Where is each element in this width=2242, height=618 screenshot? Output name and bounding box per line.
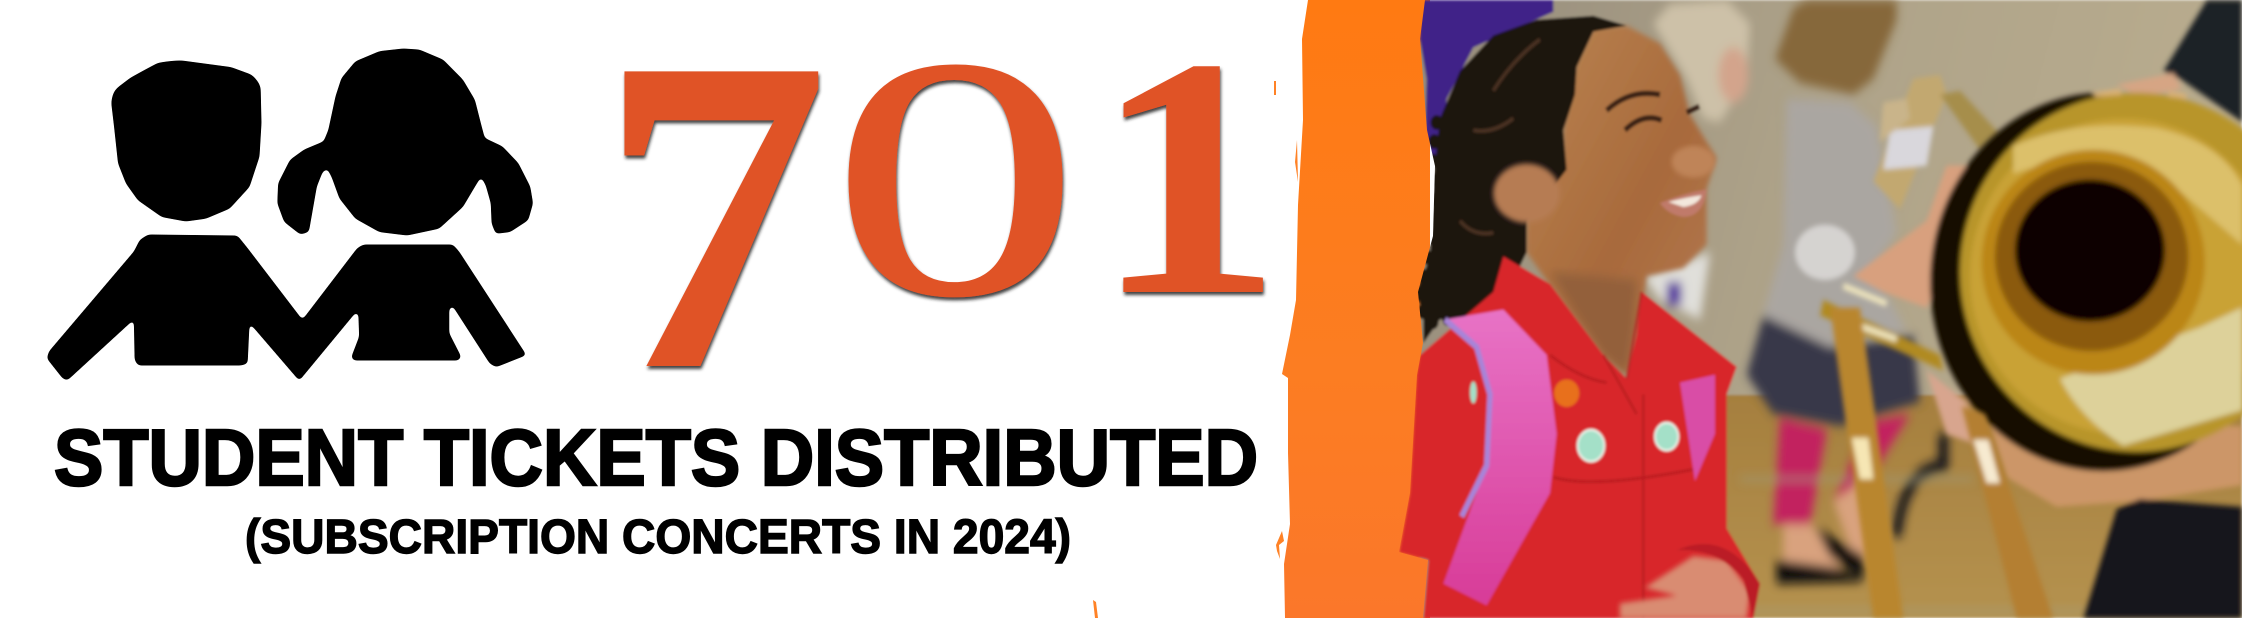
ear (1493, 164, 1560, 223)
jacket dots (1578, 430, 1604, 461)
braided hair (1417, 16, 1627, 343)
photo: tuba held behind (1873, 75, 2000, 209)
mouth (1660, 189, 1707, 217)
orange painted band (1093, 0, 1430, 618)
heading: student tickets distributed: STUDENT TICKETS DISTRIBUTED (54, 413, 1258, 502)
big number 701 (598, 0, 1283, 464)
photo: children in the background (1643, 0, 1750, 319)
photo: girl in grey and pink (1740, 0, 2087, 611)
photo: girl with braids and red jacket (1399, 0, 1760, 618)
photo: trombone player and bell (1853, 0, 2242, 618)
neck shadow (1550, 272, 1637, 375)
red jacket (1399, 256, 1760, 618)
icon: two children holding hands (47, 49, 532, 380)
subheading: subscription concerts: (SUBSCRIPTION CONCERTS IN 2024) (245, 511, 1071, 564)
photo background: wall and floor (1420, 0, 2242, 618)
big number 701: 0 (831, 0, 1080, 367)
nostril and nose highlight (1672, 146, 1715, 177)
hands (1620, 556, 1750, 618)
backpack straps (1680, 375, 1715, 481)
face (1527, 26, 1717, 375)
photo: trombone slide (1795, 225, 2053, 618)
photo: child looking at trombone (1399, 0, 2242, 618)
eyes and brow (1607, 93, 1699, 130)
purple shirt behind (1420, 0, 1553, 162)
